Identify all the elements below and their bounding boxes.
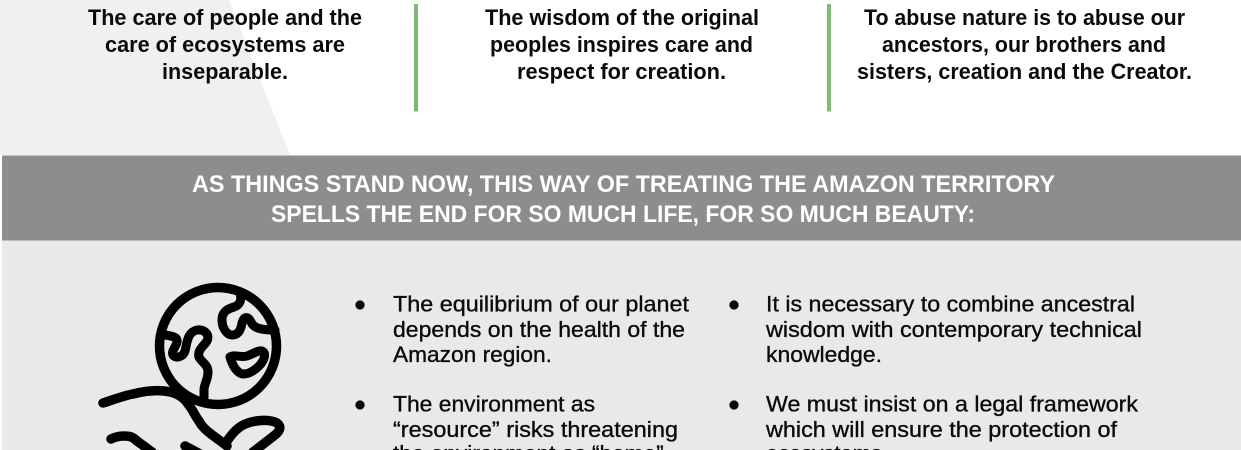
principle 2 text <box>485 5 759 84</box>
principle 2 text: respect for creation. <box>517 59 726 84</box>
banner: AS THINGS STAND NOW, THIS WAY OF TREATING THE AMAZON TERRITORY <box>192 171 1055 198</box>
bullet list right column: It is necessary to combine ancestral <box>766 292 1135 316</box>
principle 3 text: To abuse nature is to abuse our <box>864 5 1185 30</box>
principle 1 text <box>88 5 362 84</box>
bullet list left column: “resource” risks threatening <box>393 417 678 442</box>
bullet list left column <box>356 292 690 450</box>
bullet list left column: The environment as <box>393 392 595 416</box>
principle 1 text: inseparable. <box>162 59 288 84</box>
bullet list right column: knowledge. <box>766 342 882 367</box>
green divider left <box>414 4 418 112</box>
principle 1 text: care of ecosystems are <box>105 32 345 57</box>
principle 2 text: The wisdom of the original <box>485 5 759 30</box>
bullet list right column <box>730 292 1142 450</box>
principle 3 text <box>857 5 1192 84</box>
bullet list left column: The equilibrium of our planet <box>393 292 690 316</box>
bullet list right column: We must insist on a legal framework <box>766 392 1139 416</box>
bullet list left column: Amazon region. <box>393 342 552 367</box>
banner <box>2 156 1241 240</box>
background light grey diagonal shape <box>0 0 290 155</box>
principle 1 text: The care of people and the <box>88 5 362 30</box>
banner: SPELLS THE END FOR SO MUCH LIFE, FOR SO MUCH BEAUTY: <box>271 201 975 228</box>
principle 3 text: ancestors, our brothers and <box>882 32 1166 57</box>
principle 2 text: peoples inspires care and <box>490 32 753 57</box>
bullet list left column: depends on the health of the <box>393 317 685 342</box>
bullet list right column: which will ensure the protection of <box>765 417 1118 442</box>
icon: globe held in hand <box>103 288 280 450</box>
green divider right <box>827 4 831 112</box>
lower content panel background <box>2 240 1241 450</box>
bullet list right column: wisdom with contemporary technical <box>765 317 1142 342</box>
principle 3 text: sisters, creation and the Creator. <box>857 59 1192 84</box>
